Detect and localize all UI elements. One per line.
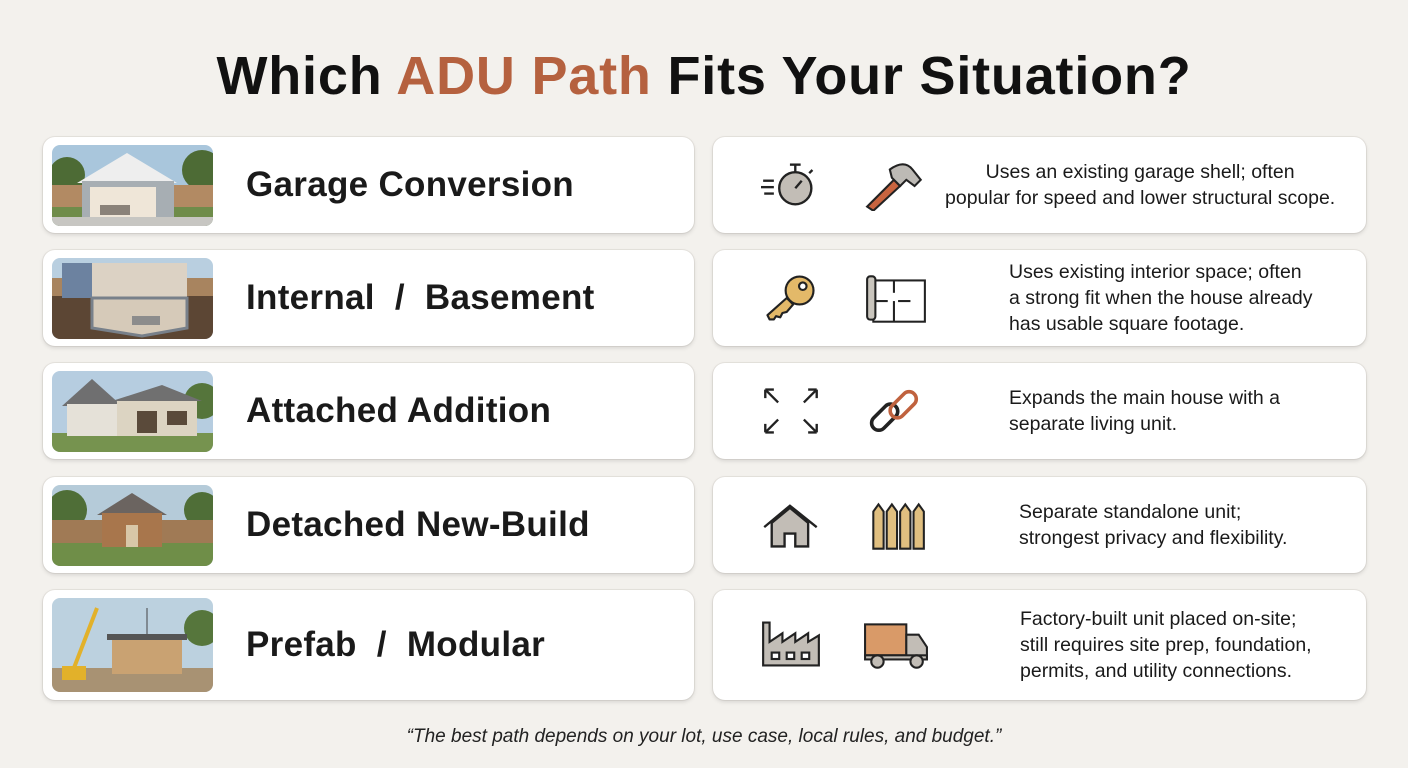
- text: [1009, 261, 1313, 335]
- heading: Garage Conversion: [246, 165, 574, 204]
- panel: internal basement: [43, 250, 694, 346]
- panel: attached addition: [43, 363, 694, 459]
- text: strongest privacy and flexibility.: [1019, 527, 1287, 549]
- icon: key: [766, 276, 815, 320]
- panel: prefab details: [713, 590, 1366, 700]
- panel: detached new-build: [43, 477, 694, 573]
- text: a strong fit when the house already: [1009, 287, 1313, 309]
- panel: prefab modular: [43, 590, 694, 700]
- heading: Prefab / Modular: [246, 625, 545, 664]
- photo: crane: [52, 598, 213, 692]
- text: [1019, 501, 1287, 549]
- panel: garage details: [713, 137, 1366, 233]
- text: permits, and utility connections.: [1020, 660, 1292, 682]
- text: still requires site prep, foundation,: [1020, 634, 1312, 656]
- icon: truck: [864, 623, 928, 669]
- icon: house: [764, 504, 818, 548]
- title: Which ADU Path Fits Your Situation?: [216, 46, 1192, 106]
- text: separate living unit.: [1009, 413, 1177, 435]
- icon: factory: [762, 622, 820, 666]
- icon: stopwatch: [761, 163, 814, 206]
- photo: basement: [52, 258, 213, 339]
- text: Factory-built unit placed on-site;: [1020, 608, 1296, 630]
- photo: detached: [52, 485, 213, 566]
- photo: attached house: [52, 371, 213, 452]
- text: Uses existing interior space; often: [1009, 261, 1302, 283]
- text: Separate standalone unit;: [1019, 501, 1241, 523]
- panel: garage conversion: [43, 137, 694, 233]
- icon: chain link: [870, 390, 918, 432]
- heading: Detached New-Build: [246, 505, 590, 544]
- icon: fence: [872, 502, 925, 550]
- text: [1009, 387, 1280, 435]
- heading: Attached Addition: [246, 391, 551, 430]
- text: has usable square footage.: [1009, 313, 1244, 335]
- icon: hammer: [866, 163, 922, 211]
- text: Uses an existing garage shell; often: [986, 161, 1295, 183]
- text: Expands the main house with a: [1009, 387, 1280, 409]
- photo: garage: [52, 145, 213, 226]
- panel: basement details: [713, 250, 1366, 346]
- quote footer: “The best path depends on your lot, use case, local rules, and budget.”: [407, 726, 1001, 747]
- text: popular for speed and lower structural scope.: [945, 187, 1335, 209]
- heading: Internal / Basement: [246, 278, 595, 317]
- icon: expand arrows: [764, 388, 818, 434]
- icon: floor plan: [866, 275, 926, 323]
- text: [945, 161, 1335, 209]
- panel: detached details: [713, 477, 1366, 573]
- panel: addition details: [713, 363, 1366, 459]
- text: [1020, 608, 1312, 682]
